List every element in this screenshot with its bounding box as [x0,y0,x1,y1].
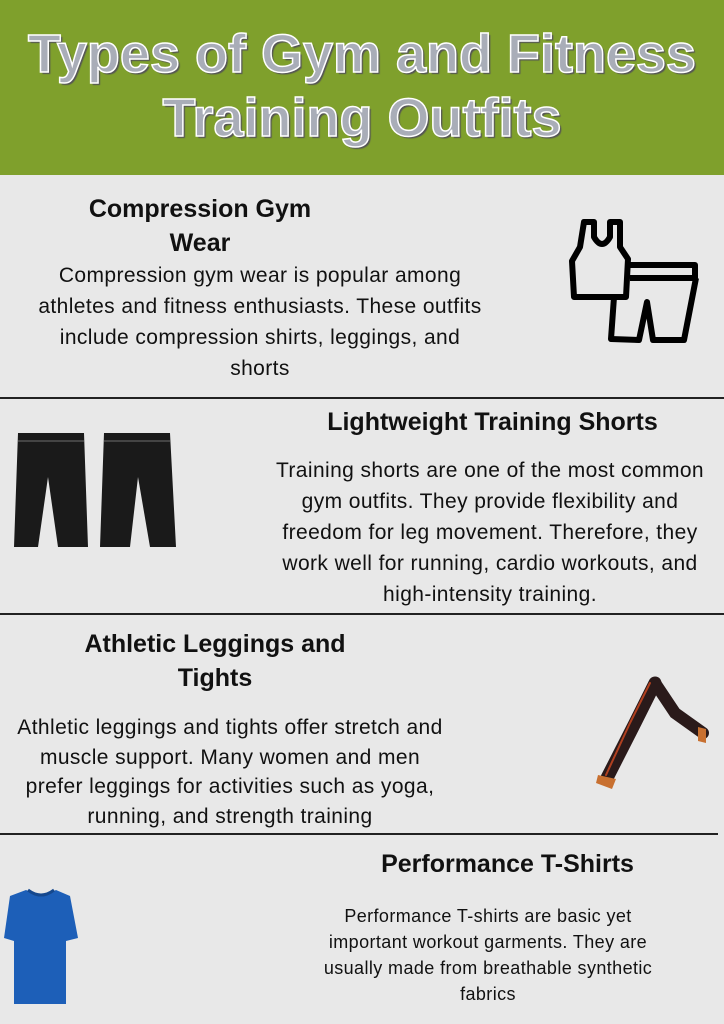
heading: Compression Gym [89,195,311,223]
text [276,459,704,606]
text: running, and strength training [87,804,373,828]
text: prefer leggings for activities such as yoga, [26,775,434,798]
image: legs in leggings [596,676,709,789]
heading: Tights [178,664,252,692]
panel: t-shirts [4,850,652,1004]
text: high-intensity training. [383,583,597,606]
text: Training shorts are one of the most common [276,459,704,482]
text: shorts [230,357,290,380]
text: include compression shirts, leggings, and [60,326,460,349]
title: Types of Gym and Fitness [28,24,696,84]
icon: tank top and shorts [569,219,699,343]
title banner [0,0,724,175]
text: muscle support. Many women and men [40,746,420,768]
heading: Athletic Leggings and [84,630,346,658]
panel: leggings [17,630,709,828]
heading [84,630,346,692]
text: gym outfits. They provide flexibility and [302,490,678,513]
heading [89,195,311,257]
text: important workout garments. They are [329,932,647,952]
text: fabrics [460,984,516,1004]
image: two shorts [14,433,176,547]
image: blue t-shirt [4,888,78,1004]
title: Training Outfits [162,88,562,148]
text: Compression gym wear is popular among [59,264,461,287]
text: freedom for leg movement. Therefore, they [282,521,698,544]
heading: Performance T-Shirts [381,850,634,878]
text: usually made from breathable synthetic [324,958,652,978]
text: work well for running, cardio workouts, and [282,552,698,575]
text [324,906,652,1004]
panel: compression [38,195,699,380]
panel: shorts [14,408,704,606]
text: Performance T-shirts are basic yet [344,906,632,926]
text [38,264,482,380]
heading: Wear [170,229,230,257]
text [17,716,443,828]
text: Athletic leggings and tights offer stretch and [17,716,443,739]
text: athletes and fitness enthusiasts. These outfits [38,295,482,318]
heading: Lightweight Training Shorts [327,408,658,436]
title [28,24,696,150]
